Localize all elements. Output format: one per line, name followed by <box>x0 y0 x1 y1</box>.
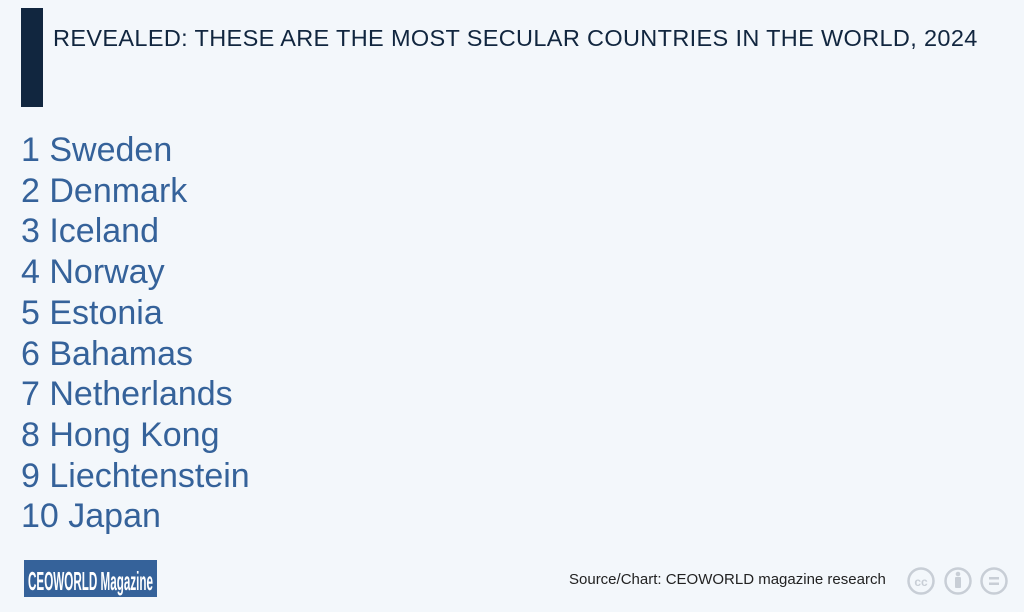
title bar accent <box>21 8 43 107</box>
ranked list: 1 Sweden <box>21 131 172 169</box>
title: REVEALED: THESE ARE THE MOST SECULAR COUNTRIES IN THE WORLD, 2024 <box>53 25 978 51</box>
ranked list: 4 Norway <box>21 253 165 291</box>
icons: creative commons: cc <box>914 575 928 589</box>
ranked list: 9 Liechtenstein <box>21 457 250 495</box>
ranked list: 5 Estonia <box>21 294 163 332</box>
icons: creative commons <box>907 567 1008 595</box>
ranked list: 2 Denmark <box>21 172 187 210</box>
ranked list: 10 Japan <box>21 497 161 535</box>
ranked list: 8 Hong Kong <box>21 416 220 454</box>
source: Source/Chart: CEOWORLD magazine research <box>569 571 886 588</box>
ranked list: 6 Bahamas <box>21 335 193 373</box>
ranked list <box>21 131 250 535</box>
ranked list: 7 Netherlands <box>21 375 233 413</box>
ranked list: 3 Iceland <box>21 212 159 250</box>
